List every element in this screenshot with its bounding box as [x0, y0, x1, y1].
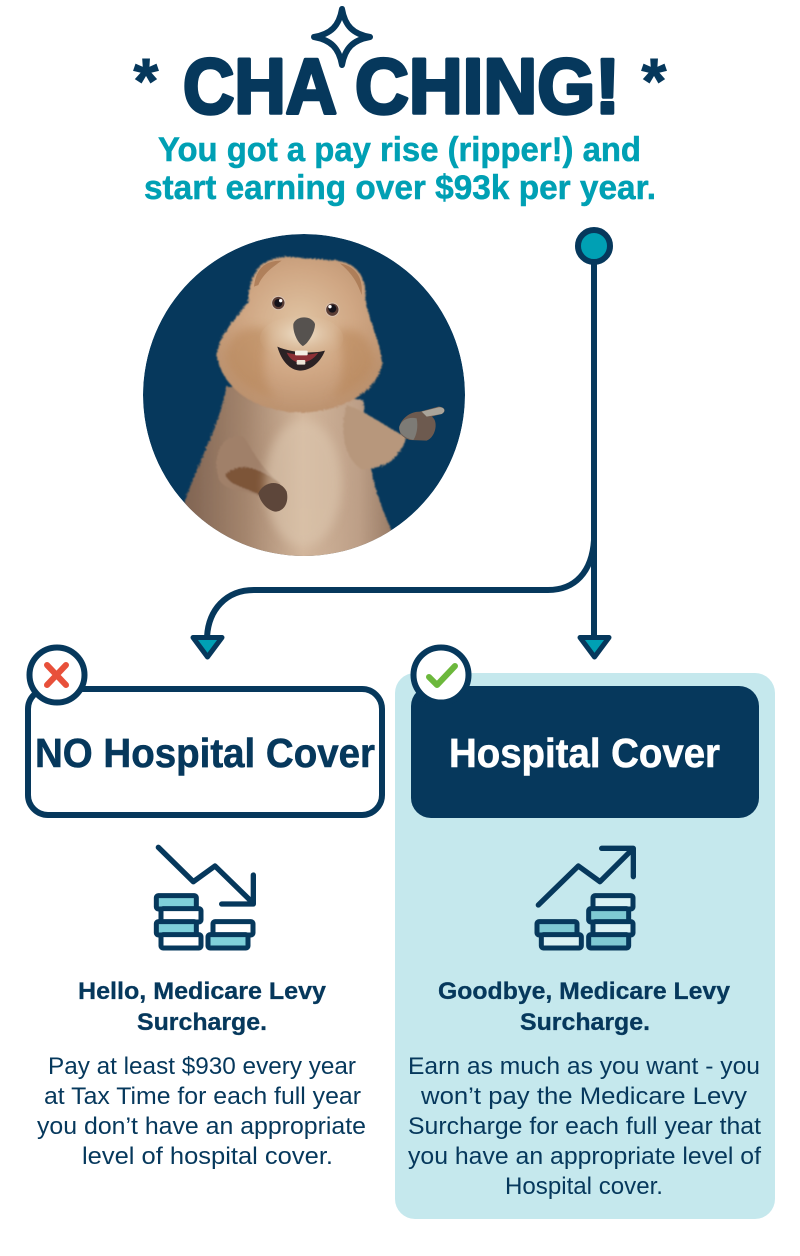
arrows: flow connector — [207, 262, 594, 638]
icon: red cross badge — [30, 648, 84, 702]
quokka head — [217, 257, 382, 413]
quokka lower paw — [258, 483, 287, 512]
icon: rising coins — [537, 848, 633, 948]
panel: hospital cover heading box — [411, 686, 759, 818]
title right asterisk: * — [642, 45, 667, 117]
left body text: level of hospital cover. — [82, 1143, 333, 1170]
icon: green tick badge — [414, 648, 468, 702]
quokka eyes — [272, 296, 339, 316]
quokka left arm — [216, 444, 272, 496]
right body text: you have an appropriate level of — [408, 1143, 761, 1170]
quokka left forearm — [225, 466, 280, 495]
quokka mouth — [277, 347, 325, 371]
icon: sparkle star — [314, 9, 370, 65]
connector main line — [591, 262, 597, 638]
quokka muzzle — [264, 322, 337, 350]
icon: falling coins — [156, 847, 253, 948]
panel: right option background — [395, 673, 775, 1219]
right heading: goodbye surcharge: Goodbye, Medicare Levy — [438, 978, 731, 1005]
quokka nose — [293, 317, 315, 346]
right body text: Earn as much as you want - you — [408, 1053, 760, 1080]
start dot — [578, 230, 610, 262]
right heading: goodbye surcharge: Surcharge. — [520, 1009, 650, 1036]
left heading: hello surcharge: Hello, Medicare Levy — [78, 978, 327, 1005]
subtitle — [144, 131, 656, 207]
subtitle: You got a pay rise (ripper!) and — [158, 131, 641, 169]
quokka chest highlight — [265, 420, 342, 547]
panel: no hospital cover heading box — [28, 689, 382, 815]
panel: hospital cover heading box: Hospital Cover — [449, 730, 720, 776]
title word CHING: CHING! — [355, 42, 620, 130]
quokka pointing arm — [343, 405, 407, 469]
quokka body — [184, 385, 392, 556]
title — [134, 9, 667, 130]
left body text: you don’t have an appropriate — [37, 1113, 366, 1140]
right heading: goodbye surcharge — [438, 978, 731, 1036]
right body text: won’t pay the Medicare Levy — [420, 1083, 747, 1110]
right body text: Surcharge for each full year that — [408, 1113, 761, 1140]
quokka cheek shading — [225, 328, 375, 400]
quokka portrait — [143, 234, 465, 567]
arrowhead: right — [580, 638, 609, 657]
left body text: at Tax Time for each full year — [44, 1083, 361, 1110]
left body text: Pay at least $930 every year — [48, 1053, 356, 1080]
left body text — [37, 1053, 366, 1170]
subtitle: start earning over $93k per year. — [144, 169, 656, 207]
right body text — [408, 1053, 761, 1200]
right body text: Hospital cover. — [505, 1173, 663, 1200]
left heading: hello surcharge: Surcharge. — [137, 1009, 267, 1036]
arrowhead: left — [193, 638, 222, 657]
connector left branch — [207, 540, 594, 638]
quokka inner ears — [254, 261, 282, 287]
title word CHA: CHA — [183, 42, 337, 130]
panel: no hospital cover heading box: NO Hospital Cover — [35, 730, 375, 776]
left heading: hello surcharge — [78, 978, 327, 1036]
title left asterisk: * — [134, 45, 159, 117]
quokka pointing hand — [399, 407, 445, 441]
